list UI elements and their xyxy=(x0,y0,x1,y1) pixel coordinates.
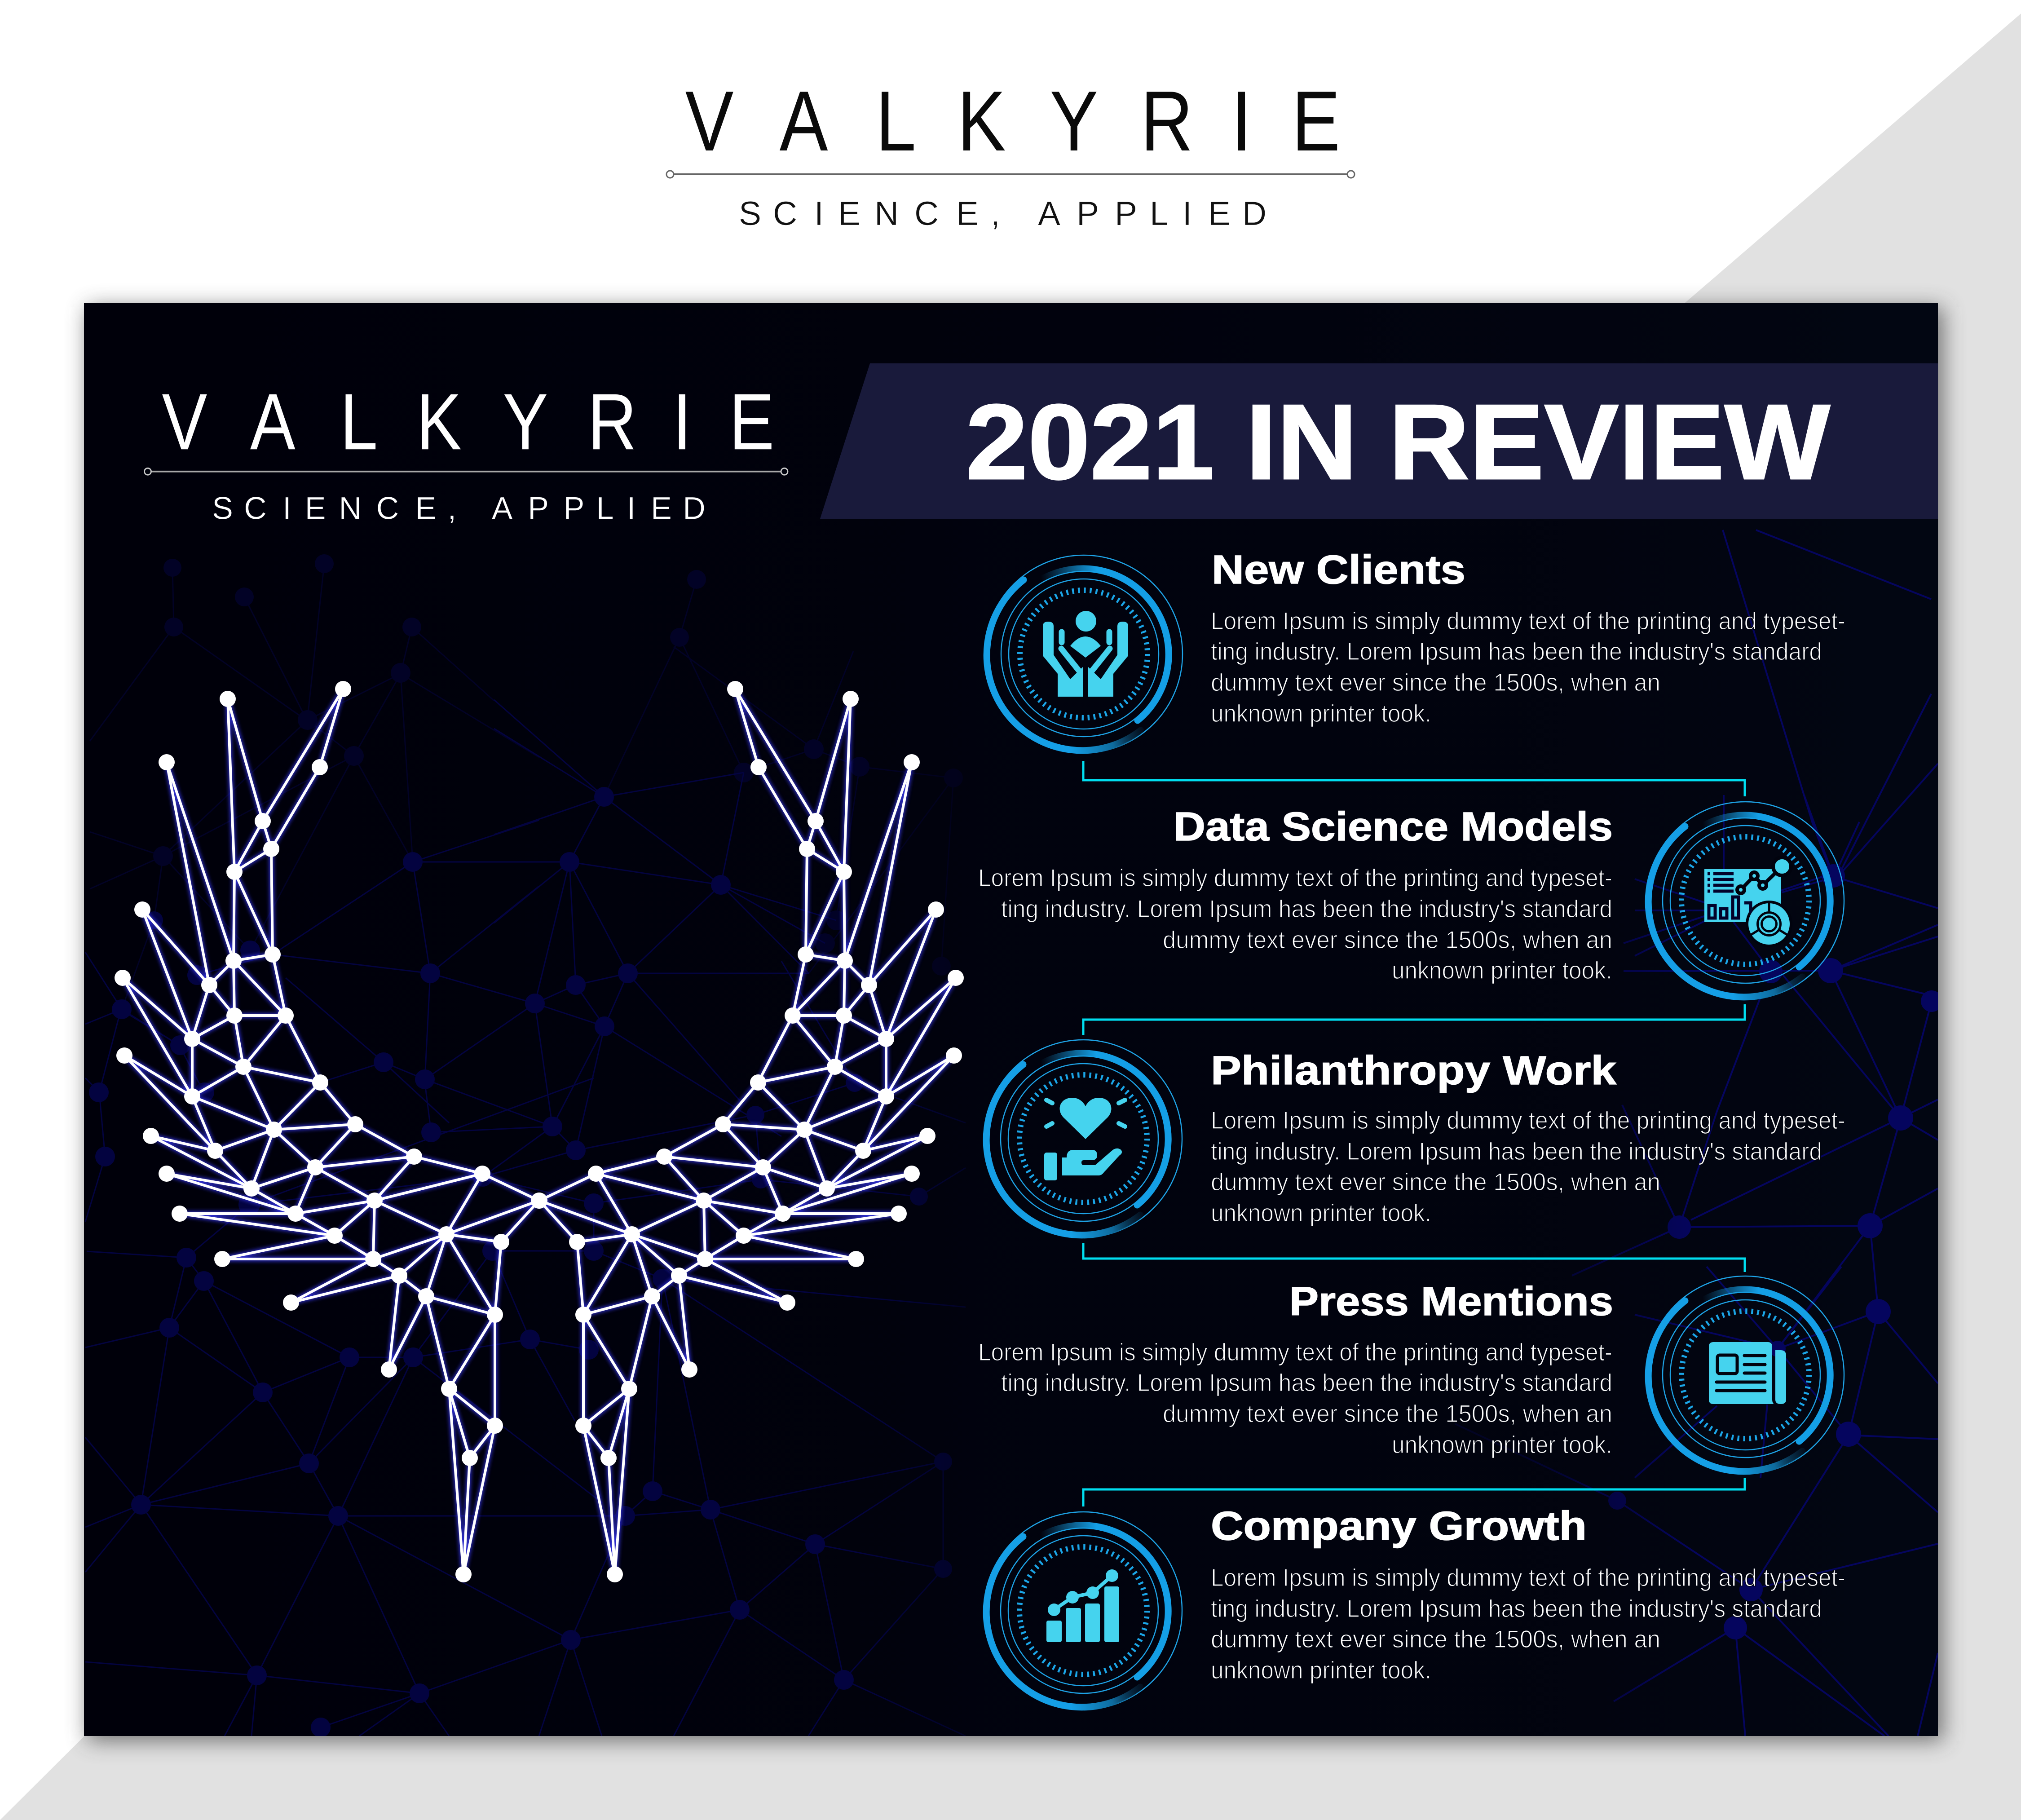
body text: dummy text ever since the 1500s, when an xyxy=(1163,1400,1612,1427)
body text: Lorem Ipsum is simply dummy text of the printing and typeset- xyxy=(1211,1564,1845,1591)
logo wordmark: VALKYRIE xyxy=(685,74,1340,169)
top logo xyxy=(666,74,1355,232)
icon: analytics dashboard xyxy=(1646,802,1844,999)
icon: hands holding person xyxy=(985,555,1183,753)
body text: dummy text ever since the 1500s, when an xyxy=(1211,1168,1660,1196)
section: data science models xyxy=(978,802,1844,999)
main dark panel xyxy=(84,303,1938,1736)
body text: unknown printer took. xyxy=(1211,699,1431,727)
title text: 2021 IN REVIEW xyxy=(966,383,1830,502)
wing network emblem xyxy=(115,681,964,1582)
icon: growth bar chart xyxy=(984,1512,1182,1710)
body text: unknown printer took. xyxy=(1392,956,1612,984)
mesh: right edge area xyxy=(1455,530,1942,1736)
mesh: central area xyxy=(85,700,966,1737)
heading: Company Growth xyxy=(1211,1504,1587,1549)
body text: Lorem Ipsum is simply dummy text of the printing and typeset- xyxy=(1211,1106,1845,1134)
body text: unknown printer took. xyxy=(1211,1199,1431,1227)
body text: ting industry. Lorem Ipsum has been the industry's standard xyxy=(1001,1369,1612,1396)
section: press mentions xyxy=(978,1276,1844,1474)
logo tagline: SCIENCE, APPLIED xyxy=(739,194,1266,232)
heading: Data Science Models xyxy=(1174,804,1613,849)
heading: New Clients xyxy=(1212,548,1465,592)
icon: newspaper xyxy=(1646,1276,1844,1474)
body text xyxy=(1211,1106,1845,1227)
section: company growth xyxy=(984,1504,1845,1710)
body text: ting industry. Lorem Ipsum has been the industry's standard xyxy=(1211,637,1822,665)
body text xyxy=(978,1338,1612,1458)
wing lines xyxy=(123,689,956,1574)
panel logo xyxy=(145,377,788,526)
body text: dummy text ever since the 1500s, when an xyxy=(1211,1625,1660,1653)
body text xyxy=(1211,1564,1845,1684)
connector lines xyxy=(1083,761,1745,1506)
panel drop shadow xyxy=(88,307,1943,1741)
body text: Lorem Ipsum is simply dummy text of the printing and typeset- xyxy=(978,864,1612,892)
wing glow xyxy=(123,689,956,1574)
body text: ting industry. Lorem Ipsum has been the industry's standard xyxy=(1001,895,1612,923)
body text: ting industry. Lorem Ipsum has been the industry's standard xyxy=(1211,1595,1822,1622)
body text: unknown printer took. xyxy=(1392,1431,1612,1458)
icon: heart in hand xyxy=(984,1040,1182,1237)
panel logo divider xyxy=(145,468,788,475)
heading: Press Mentions xyxy=(1289,1279,1613,1324)
body text: dummy text ever since the 1500s, when an xyxy=(1163,926,1612,954)
body text: unknown printer took. xyxy=(1211,1656,1431,1684)
body text xyxy=(978,864,1612,984)
panel logo tagline: SCIENCE, APPLIED xyxy=(212,490,706,526)
body text xyxy=(1211,607,1845,727)
heading: Philanthropy Work xyxy=(1211,1048,1617,1093)
wing nodes xyxy=(115,681,964,1582)
mesh: upper dim area xyxy=(90,554,963,1009)
background network mesh xyxy=(85,517,1942,1738)
section: new clients xyxy=(985,548,1845,753)
section: philanthropy work xyxy=(984,1040,1845,1237)
body text: Lorem Ipsum is simply dummy text of the printing and typeset- xyxy=(978,1338,1612,1366)
title banner xyxy=(820,363,1938,519)
body text: Lorem Ipsum is simply dummy text of the printing and typeset- xyxy=(1211,607,1845,635)
body text: ting industry. Lorem Ipsum has been the industry's standard xyxy=(1211,1137,1822,1165)
body text: dummy text ever since the 1500s, when an xyxy=(1211,668,1660,696)
logo divider xyxy=(666,171,1355,178)
panel logo wordmark: VALKYRIE xyxy=(162,377,774,466)
